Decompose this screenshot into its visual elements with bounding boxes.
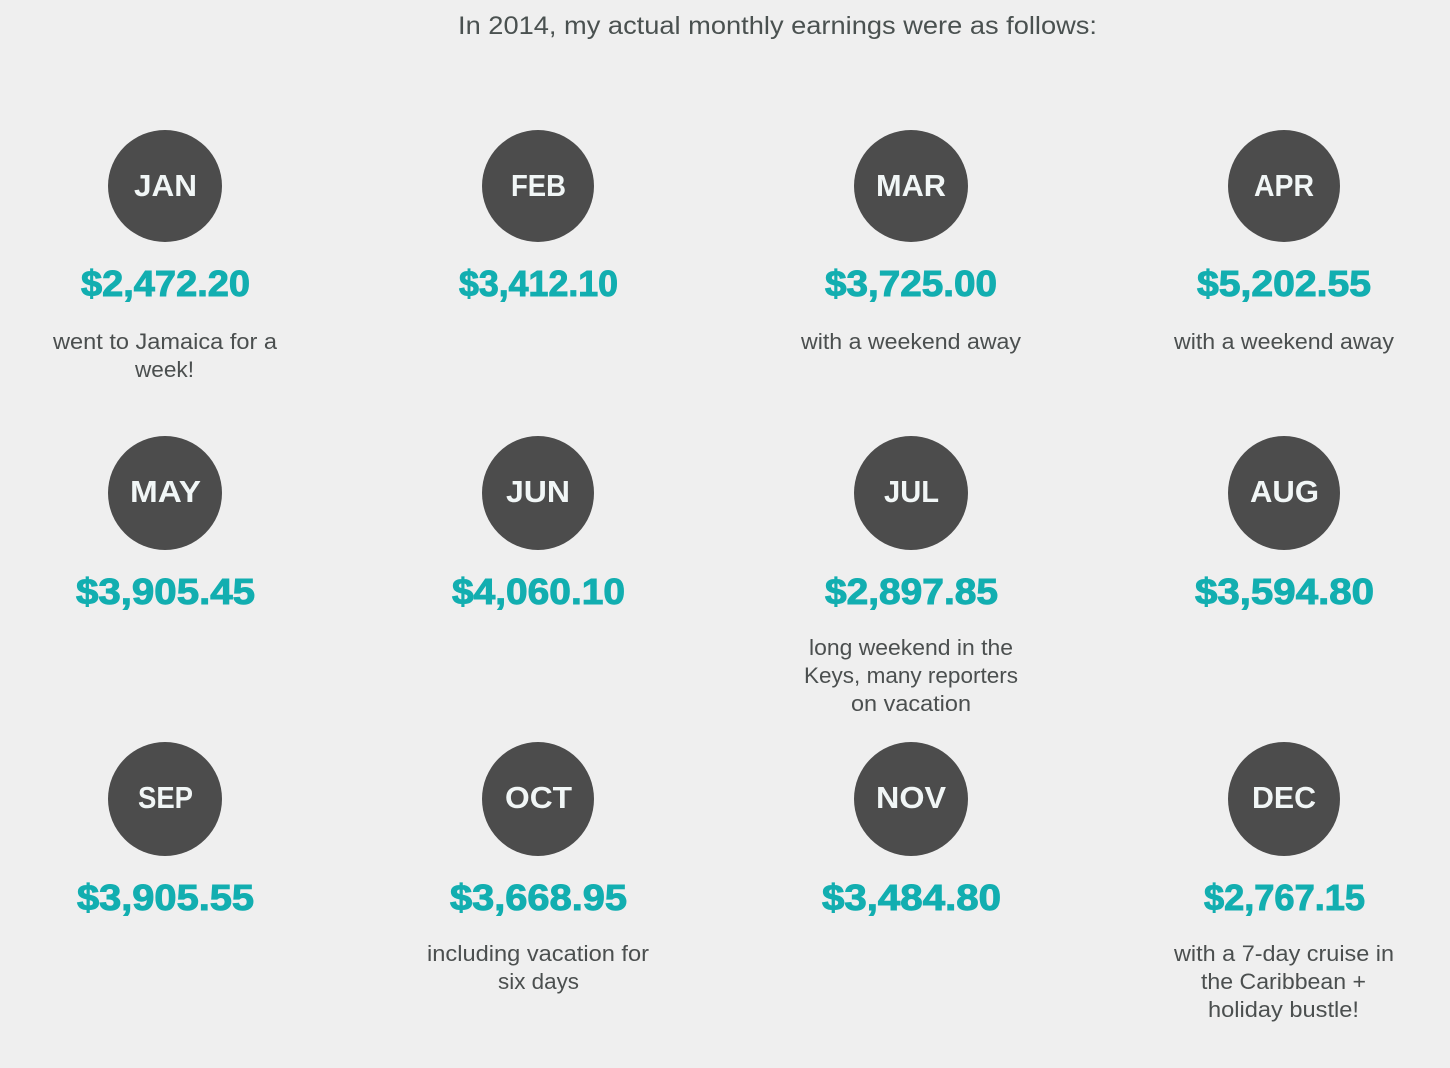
icon: JUN badge: JUN — [506, 474, 570, 509]
December note — [1173, 941, 1394, 1022]
icon: JAN badge: JAN — [134, 168, 197, 203]
panel: February — [459, 130, 618, 304]
icon: AUG badge — [1228, 436, 1340, 550]
icon: APR badge: APR — [1254, 168, 1314, 203]
panel: July — [804, 436, 1018, 716]
April earnings: $5,202.55 — [1197, 263, 1371, 304]
January note: went to Jamaica for a — [52, 329, 278, 354]
December note: the Caribbean + — [1201, 969, 1366, 994]
panel: May — [76, 436, 255, 612]
icon: JAN badge — [108, 130, 222, 242]
icon: FEB badge — [482, 130, 594, 242]
icon: OCT badge: OCT — [505, 780, 572, 815]
panel: November — [822, 742, 1001, 918]
July note: long weekend in the — [809, 635, 1013, 660]
icon: MAR badge: MAR — [876, 168, 946, 203]
October note: including vacation for — [427, 941, 649, 966]
panel: January — [52, 130, 278, 382]
March note: with a weekend away — [800, 329, 1021, 354]
October earnings: $3,668.95 — [450, 877, 627, 918]
August earnings: $3,594.80 — [1195, 571, 1374, 612]
icon: MAY badge — [108, 436, 222, 550]
panel: September — [77, 742, 254, 918]
icon: DEC badge — [1228, 742, 1340, 856]
icon: SEP badge — [108, 742, 222, 856]
icon: NOV badge — [854, 742, 968, 856]
title: In 2014, my actual monthly earnings were as follows: — [458, 12, 1097, 40]
icon: DEC badge: DEC — [1252, 780, 1316, 815]
July earnings: $2,897.85 — [825, 571, 998, 612]
icon: MAR badge — [854, 130, 968, 242]
icon: JUN badge — [482, 436, 594, 550]
January note — [52, 329, 278, 382]
panel: April — [1173, 130, 1394, 354]
panel: June — [452, 436, 625, 612]
icon: FEB badge: FEB — [511, 168, 566, 203]
January earnings: $2,472.20 — [81, 263, 250, 304]
June earnings: $4,060.10 — [452, 571, 625, 612]
November earnings: $3,484.80 — [822, 877, 1001, 918]
October note: six days — [498, 969, 579, 994]
December note: holiday bustle! — [1208, 997, 1359, 1022]
panel: October — [427, 742, 649, 994]
July note — [804, 635, 1018, 716]
October note — [427, 941, 649, 994]
December note: with a 7-day cruise in — [1173, 941, 1394, 966]
icon: JUL badge — [854, 436, 968, 550]
July note: Keys, many reporters — [804, 663, 1018, 688]
January note: week! — [134, 357, 194, 382]
panel: December — [1173, 742, 1394, 1022]
December earnings: $2,767.15 — [1204, 877, 1365, 918]
panel: August — [1195, 436, 1374, 612]
April note: with a weekend away — [1173, 329, 1394, 354]
icon: MAY badge: MAY — [130, 474, 201, 509]
May earnings: $3,905.45 — [76, 571, 255, 612]
February earnings: $3,412.10 — [459, 263, 618, 304]
March earnings: $3,725.00 — [825, 263, 997, 304]
icon: APR badge — [1228, 130, 1340, 242]
icon: NOV badge: NOV — [876, 780, 946, 815]
icon: AUG badge: AUG — [1250, 474, 1319, 509]
September earnings: $3,905.55 — [77, 877, 254, 918]
panel: March — [800, 130, 1021, 354]
icon: OCT badge — [482, 742, 594, 856]
July note: on vacation — [851, 691, 971, 716]
icon: SEP badge: SEP — [138, 780, 193, 815]
icon: JUL badge: JUL — [884, 474, 939, 509]
